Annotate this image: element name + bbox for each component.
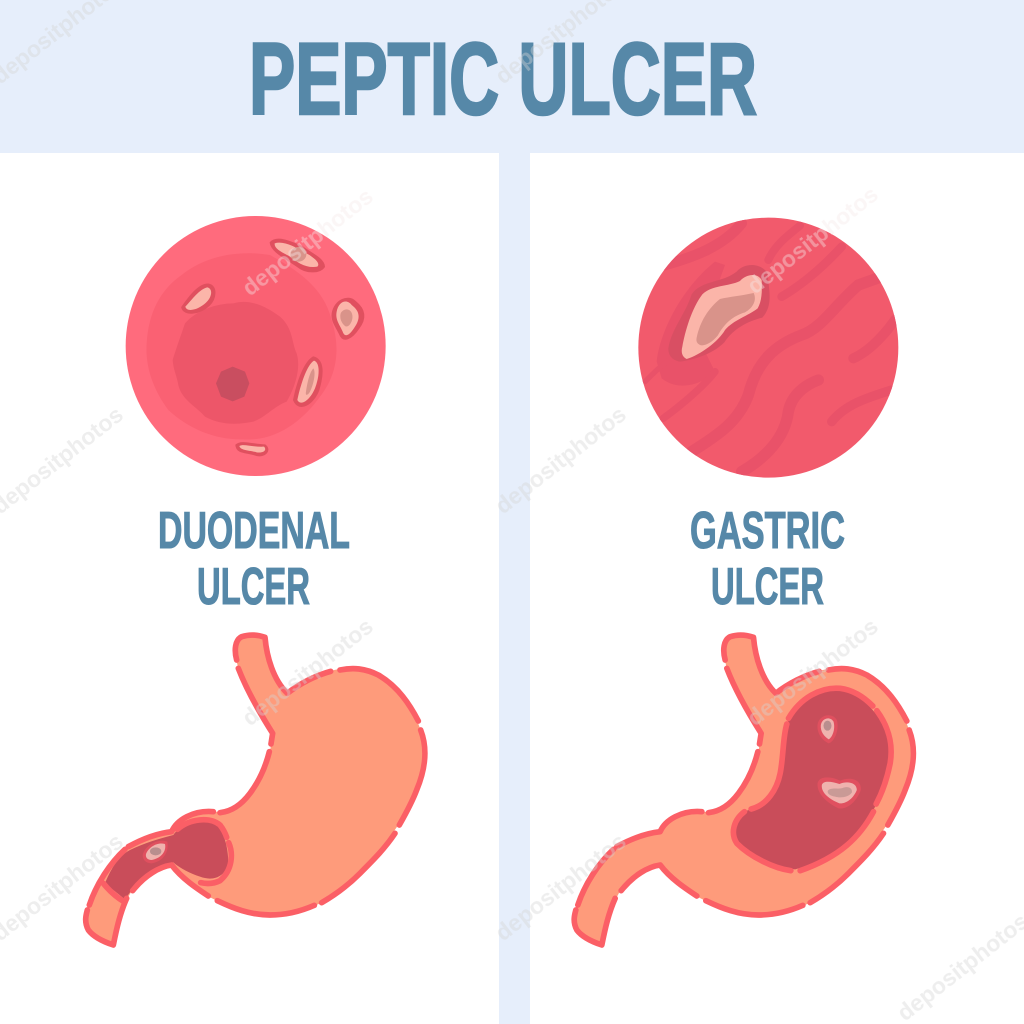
watermark: depositphotos bbox=[237, 183, 378, 301]
duodenum inflamed area bbox=[105, 821, 228, 899]
ulcer lesion: right bbox=[333, 299, 363, 339]
ulcer lesion: large bbox=[668, 265, 770, 362]
vertical divider bbox=[499, 153, 530, 1024]
panel: duodenal ulcer endoscopic view bbox=[126, 216, 386, 476]
label: gastric ulcer bbox=[690, 502, 845, 616]
label: duodenal ulcer: DUODENAL bbox=[158, 502, 350, 560]
ulcer lesion: bottom bbox=[236, 443, 268, 456]
watermark: depositphotos bbox=[490, 401, 631, 519]
watermark: depositphotos bbox=[742, 181, 883, 299]
label: duodenal ulcer: ULCER bbox=[197, 558, 310, 616]
panel: gastric ulcer endoscopic view bbox=[638, 218, 898, 478]
watermark: depositphotos bbox=[490, 828, 631, 946]
label: duodenal ulcer bbox=[158, 502, 350, 616]
inner wall outline bbox=[103, 820, 231, 902]
gastric lesion: lower bbox=[817, 777, 861, 809]
stomach illustration: gastric ulcer bbox=[574, 635, 913, 945]
watermark: depositphotos bbox=[742, 613, 883, 731]
mucosal folds bbox=[645, 223, 895, 472]
label: gastric ulcer: ULCER bbox=[711, 558, 824, 616]
lumen opening bbox=[216, 367, 249, 401]
stomach illustration: duodenal ulcer bbox=[86, 635, 425, 945]
title: PEPTIC ULCER bbox=[249, 22, 757, 136]
label: gastric ulcer: GASTRIC bbox=[690, 502, 845, 560]
ulcer lesion: upper left bbox=[182, 284, 215, 313]
ulcer lesion: lower right bbox=[294, 357, 322, 406]
watermark: depositphotos bbox=[237, 613, 378, 731]
gastric lesion: upper bbox=[817, 715, 838, 743]
ulcer lesion: top right bbox=[271, 240, 324, 271]
duodenal lesion bbox=[143, 841, 168, 863]
stomach outline bbox=[86, 635, 425, 945]
stomach outline bbox=[574, 635, 913, 945]
header band bbox=[0, 0, 1024, 153]
inflamed stomach lining bbox=[733, 688, 891, 871]
